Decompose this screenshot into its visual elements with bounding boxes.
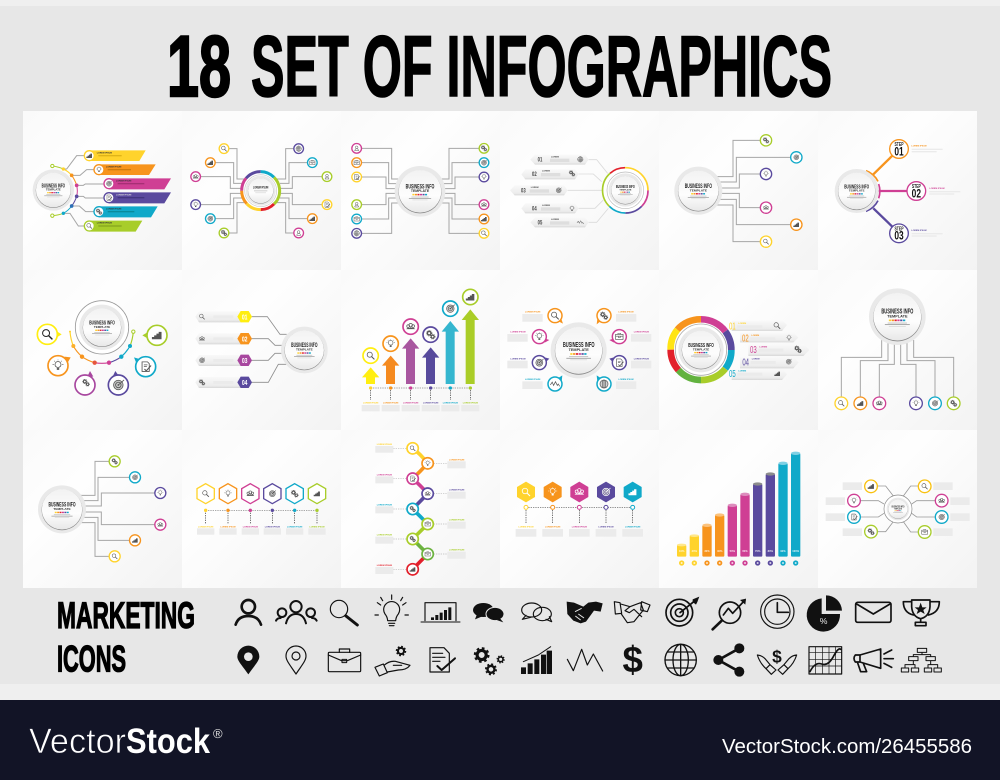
- label blocks: LOREM IPSUM: [525, 312, 540, 314]
- icon: handshake filled: [567, 602, 603, 623]
- hub: BUSINESS INFO: [844, 184, 869, 190]
- colored parallelogram bars: LOREM IPSUM: [97, 152, 112, 154]
- percent labels: 10%: [679, 549, 685, 553]
- icon: dollar in hands: $: [772, 647, 782, 667]
- icon: organization chart: [901, 648, 941, 672]
- label blocks: LOREM IPSUM: [198, 526, 213, 528]
- heading: marketing icons: [57, 595, 195, 680]
- icon: filled pin: [237, 646, 259, 674]
- panel: cylinder bar chart: [659, 430, 818, 588]
- hexagons: [517, 482, 642, 502]
- text blocks: [826, 482, 970, 536]
- label blocks: LOREM IPSUM: [377, 504, 392, 506]
- rainbow hub: LOREM IPSUM: [253, 185, 268, 189]
- rainbow ring: [670, 319, 732, 380]
- heading: marketing icons: ICONS: [57, 638, 126, 680]
- hub: TEMPLATE: [569, 348, 589, 352]
- label blocks: LOREM IPSUM: [443, 403, 458, 405]
- connectors: [252, 317, 287, 382]
- step 03: [890, 224, 943, 243]
- speech circle: hand: [75, 371, 95, 395]
- hub: [674, 167, 722, 215]
- hub: BUSINESS INFO: [616, 184, 635, 189]
- icon: handshake outline: [614, 602, 650, 623]
- label blocks: LOREM IPSUM: [449, 459, 464, 461]
- colored parallelogram bars: LOREM IPSUM: [106, 208, 121, 210]
- hub: [38, 485, 86, 533]
- label blocks: LOREM IPSUM: [383, 403, 398, 405]
- tag 03: [195, 355, 252, 366]
- colored parallelogram bars: LOREM IPSUM: [106, 166, 121, 168]
- label blocks: LOREM IPSUM: [510, 332, 526, 334]
- label blocks: LOREM IPSUM: [403, 403, 418, 405]
- hub: BUSINESS INFO: [688, 343, 714, 349]
- tags: 03: [521, 188, 526, 195]
- label blocks: LOREM IPSUM: [545, 527, 560, 529]
- hub: TEMPLATE: [693, 347, 709, 351]
- percent labels: 70%: [755, 549, 761, 553]
- hub: TEMPLATE: [690, 188, 707, 192]
- label blocks: LOREM IPSUM: [572, 527, 587, 529]
- percent labels: 80%: [768, 549, 774, 553]
- speech circle: bulb: [48, 356, 71, 376]
- panel: three steps: [818, 111, 977, 271]
- panel: speech circles around hub: [23, 270, 182, 430]
- marketing icons right group: [521, 595, 941, 680]
- icon: hand with gear: [375, 647, 410, 676]
- tags: 04: [532, 206, 537, 213]
- panel: radial two-sided tree with rainbow ring: [182, 111, 341, 271]
- hub: TEMPLATE: [53, 507, 71, 511]
- hub: TEMPLATE: [887, 315, 908, 319]
- label blocks: [375, 444, 466, 574]
- footer logo: Stock: [126, 722, 210, 761]
- icon: dollar sign: $: [622, 639, 643, 680]
- percent labels: 100%: [792, 549, 800, 553]
- panel: bars from hub: [23, 111, 182, 271]
- percent labels: 90%: [780, 549, 786, 553]
- colored arc with dots: [51, 164, 78, 217]
- hub: TEMPLATE: [411, 189, 430, 193]
- icon: envelope: [856, 602, 891, 622]
- icon circles: [84, 151, 114, 231]
- rainbow hub: [242, 172, 280, 210]
- hub: [609, 173, 642, 207]
- tags: LOREM: [751, 335, 759, 337]
- icon: outline pin: [286, 646, 306, 674]
- tags: 01: [729, 321, 736, 332]
- hub: TEMPLATE: [619, 188, 632, 191]
- tag 01: 01: [242, 312, 248, 321]
- speech circle: search: [37, 324, 62, 344]
- tags: 05: [538, 219, 543, 226]
- tags: 03: [750, 345, 757, 356]
- label blocks: LOREM IPSUM: [377, 444, 392, 446]
- hub: BUSINESS INFO: [892, 505, 905, 509]
- label blocks: LOREM IPSUM: [625, 527, 640, 529]
- marketing icons left group: [236, 595, 504, 676]
- hub: [884, 495, 912, 523]
- icon: growth bars: [521, 647, 552, 674]
- icon: pie chart: %: [820, 616, 828, 626]
- icon: gears: [475, 648, 504, 674]
- panel: outlined hexagon timeline: [182, 430, 341, 588]
- tags: [729, 321, 809, 380]
- label blocks: LOREM IPSUM: [449, 519, 464, 521]
- percent labels: 40%: [717, 549, 723, 553]
- speech circle: document: [134, 357, 156, 377]
- label blocks: LOREM IPSUM: [518, 527, 534, 529]
- step 01: [890, 140, 943, 158]
- speech circle: target: [108, 371, 128, 395]
- hub: [869, 288, 926, 345]
- tags: LOREM: [759, 346, 767, 348]
- title: [167, 19, 832, 115]
- step 03: STEP: [894, 226, 904, 232]
- panel: top-down tree: [818, 270, 977, 430]
- tags: LOREM: [551, 156, 559, 158]
- tag 01: [195, 311, 252, 322]
- speech icon nodes: [532, 309, 626, 391]
- footer logo: [29, 722, 223, 761]
- label blocks: LOREM IPSUM: [618, 379, 634, 381]
- hub: BUSINESS INFO: [406, 183, 434, 190]
- tags: [510, 155, 589, 227]
- icon: group: [276, 601, 317, 623]
- footer image id: VectorStock.com/26455586: [722, 736, 972, 758]
- label blocks: LOREM IPSUM: [449, 490, 464, 492]
- tag 04: 04: [242, 378, 248, 387]
- tags: LOREM: [542, 171, 550, 173]
- step 03: 03: [894, 229, 904, 243]
- rainbow ring: [603, 168, 648, 213]
- percent labels: 30%: [704, 549, 710, 553]
- panel: small hub with eight nodes: [818, 430, 977, 588]
- arrows: [362, 309, 479, 384]
- tag 02: 02: [242, 334, 247, 343]
- icon nodes: [760, 135, 802, 247]
- icon nodes: [109, 456, 166, 562]
- hub: BUSINESS INFO: [685, 183, 712, 190]
- label blocks: LOREM IPSUM: [634, 358, 649, 360]
- colored parallelogram bars: LOREM IPSUM: [116, 194, 131, 196]
- icon: grid chart: [809, 647, 842, 674]
- label blocks: LOREM IPSUM: [525, 379, 540, 381]
- icon: share: [713, 643, 744, 677]
- hexagons: [197, 484, 326, 504]
- icon: chat filled: [473, 603, 504, 622]
- connectors: [841, 340, 954, 397]
- timeline: [524, 505, 635, 524]
- heading: marketing icons: MARKETING: [57, 595, 195, 636]
- hub: TEMPLATE: [296, 348, 313, 352]
- connectors and arcs: [866, 156, 907, 227]
- icon: laptop chart: [421, 603, 460, 622]
- hub: [281, 327, 328, 373]
- hub: TEMPLATE: [894, 507, 902, 510]
- label blocks: [507, 312, 651, 389]
- footer logo: ®: [213, 726, 223, 741]
- icon: pie chart: [807, 595, 842, 632]
- tags: LOREM: [542, 205, 550, 207]
- icon circles: [363, 289, 478, 363]
- step 02: 02: [912, 186, 921, 200]
- hub: BUSINESS INFO: [291, 343, 318, 349]
- bars: [677, 452, 800, 557]
- tag 02: [195, 333, 252, 344]
- label blocks: LOREM IPSUM: [363, 403, 378, 405]
- connectors: [201, 149, 322, 233]
- colored arc with dots: [69, 330, 135, 365]
- colored parallelogram bars: LOREM IPSUM: [116, 180, 131, 182]
- icon: chat outline: [522, 603, 552, 622]
- hub: [678, 327, 724, 372]
- icon: light bulb: [375, 595, 408, 626]
- panel: hub with eight speech icons: [500, 270, 659, 430]
- icon nodes: [191, 144, 332, 238]
- timeline: [204, 509, 319, 524]
- label blocks: LOREM IPSUM: [243, 526, 258, 528]
- label blocks: [516, 527, 643, 537]
- footer bar: [0, 700, 1000, 780]
- panel: one-sided tree: [659, 111, 818, 271]
- connector lines: [568, 160, 608, 222]
- panel: arrow growth chart: [341, 270, 500, 430]
- panel: numbered tags with rainbow ring: [500, 111, 659, 271]
- hub: [33, 169, 74, 211]
- label blocks: LOREM IPSUM: [377, 535, 392, 537]
- tags: 05: [729, 369, 736, 380]
- hub: BUSINESS INFO: [48, 501, 76, 508]
- icon: megaphone: [854, 649, 893, 672]
- tags: 02: [532, 171, 537, 178]
- connectors: [715, 140, 790, 242]
- label blocks: LOREM IPSUM: [309, 526, 325, 528]
- hub with thin outer ring: TEMPLATE: [94, 325, 110, 329]
- hub: BUSINESS INFO: [563, 340, 595, 349]
- label blocks: LOREM IPSUM: [510, 358, 526, 360]
- panel: filled hexagon timeline: [500, 430, 659, 588]
- panel: large hub tree: [341, 111, 500, 271]
- tags: LOREM: [738, 370, 746, 372]
- connectors: [63, 156, 104, 226]
- tags: LOREM: [531, 187, 539, 189]
- icon: target: [666, 597, 699, 626]
- hub: [835, 169, 879, 213]
- step 01: 01: [894, 144, 904, 158]
- icon nodes: [352, 143, 489, 238]
- label blocks: LOREM IPSUM: [463, 403, 478, 405]
- label blocks: LOREM IPSUM: [598, 527, 614, 529]
- label blocks: LOREM IPSUM: [634, 332, 649, 334]
- percent labels: 60%: [742, 549, 748, 553]
- tags: LOREM: [738, 323, 746, 325]
- colored parallelogram bars: LOREM IPSUM: [97, 223, 112, 225]
- connectors: [362, 148, 479, 233]
- footer logo: Vector: [29, 722, 126, 761]
- tags: 02: [742, 334, 749, 345]
- step 02: STEP: [912, 184, 921, 190]
- colored parallelogram bars: [89, 150, 171, 232]
- panel: vertical snake timeline: [341, 430, 500, 588]
- label blocks: LOREM IPSUM: [377, 565, 392, 567]
- icon nodes: [848, 480, 948, 538]
- icon: globe: [665, 644, 696, 676]
- panel: one-sided tree lower: [23, 430, 182, 588]
- dotted leaders: [393, 448, 447, 569]
- snake connectors: [413, 448, 428, 569]
- hub with thin outer ring: [75, 301, 129, 354]
- tag 03: 03: [242, 356, 247, 365]
- tags: 04: [742, 357, 749, 368]
- nodes: [407, 443, 433, 575]
- hub: [395, 166, 445, 217]
- tags: 01: [538, 157, 543, 164]
- marker dots: [679, 560, 798, 566]
- hub: TEMPLATE: [46, 188, 61, 192]
- hub: BUSINESS INFO: [881, 306, 913, 315]
- timeline axis: [369, 386, 472, 400]
- icon: dollar in hands: [757, 647, 797, 674]
- icon: magnifier: [330, 600, 357, 625]
- label blocks: LOREM IPSUM: [377, 474, 392, 476]
- icon: document check: [430, 648, 455, 672]
- icon: briefcase: [328, 649, 361, 672]
- label blocks: LOREM IPSUM: [449, 550, 464, 552]
- title: 18: [167, 19, 231, 115]
- icon: magnifier chart: [713, 599, 746, 629]
- label blocks: LOREM IPSUM: [265, 526, 280, 528]
- panel: hexagon numbered tags: [182, 270, 341, 430]
- percent labels: 20%: [692, 549, 698, 553]
- connectors: [80, 461, 155, 556]
- percent labels: 50%: [730, 549, 736, 553]
- icon: clock: [761, 595, 794, 628]
- hub: TEMPLATE: [849, 189, 865, 193]
- icon nodes: [835, 397, 960, 410]
- label blocks: LOREM IPSUM: [423, 403, 438, 405]
- label blocks: LOREM IPSUM: [287, 526, 302, 528]
- tags: LOREM: [551, 219, 559, 221]
- step 03: LOREM IPSUM: [911, 230, 927, 232]
- panel: ring with five tags: [659, 270, 818, 430]
- tag 04: [195, 377, 252, 388]
- icon: trophy: [903, 600, 939, 626]
- speech circle: chart: [142, 325, 167, 345]
- step 01: LOREM IPSUM: [911, 146, 927, 148]
- icon: person: [236, 600, 261, 625]
- step 02: [907, 182, 960, 200]
- icon: zigzag line: [567, 649, 603, 671]
- tags: LOREM: [752, 359, 760, 361]
- label blocks: [197, 526, 326, 535]
- step 02: LOREM IPSUM: [929, 188, 945, 190]
- percent labels: [679, 549, 800, 553]
- hub: BUSINESS INFO: [42, 184, 65, 190]
- hub: [551, 322, 607, 378]
- connectors: [861, 486, 935, 532]
- step 01: STEP: [894, 142, 904, 148]
- label blocks: [362, 403, 479, 411]
- label blocks: LOREM IPSUM: [618, 312, 634, 314]
- label blocks: LOREM IPSUM: [220, 526, 236, 528]
- hub with thin outer ring: BUSINESS INFO: [89, 321, 115, 327]
